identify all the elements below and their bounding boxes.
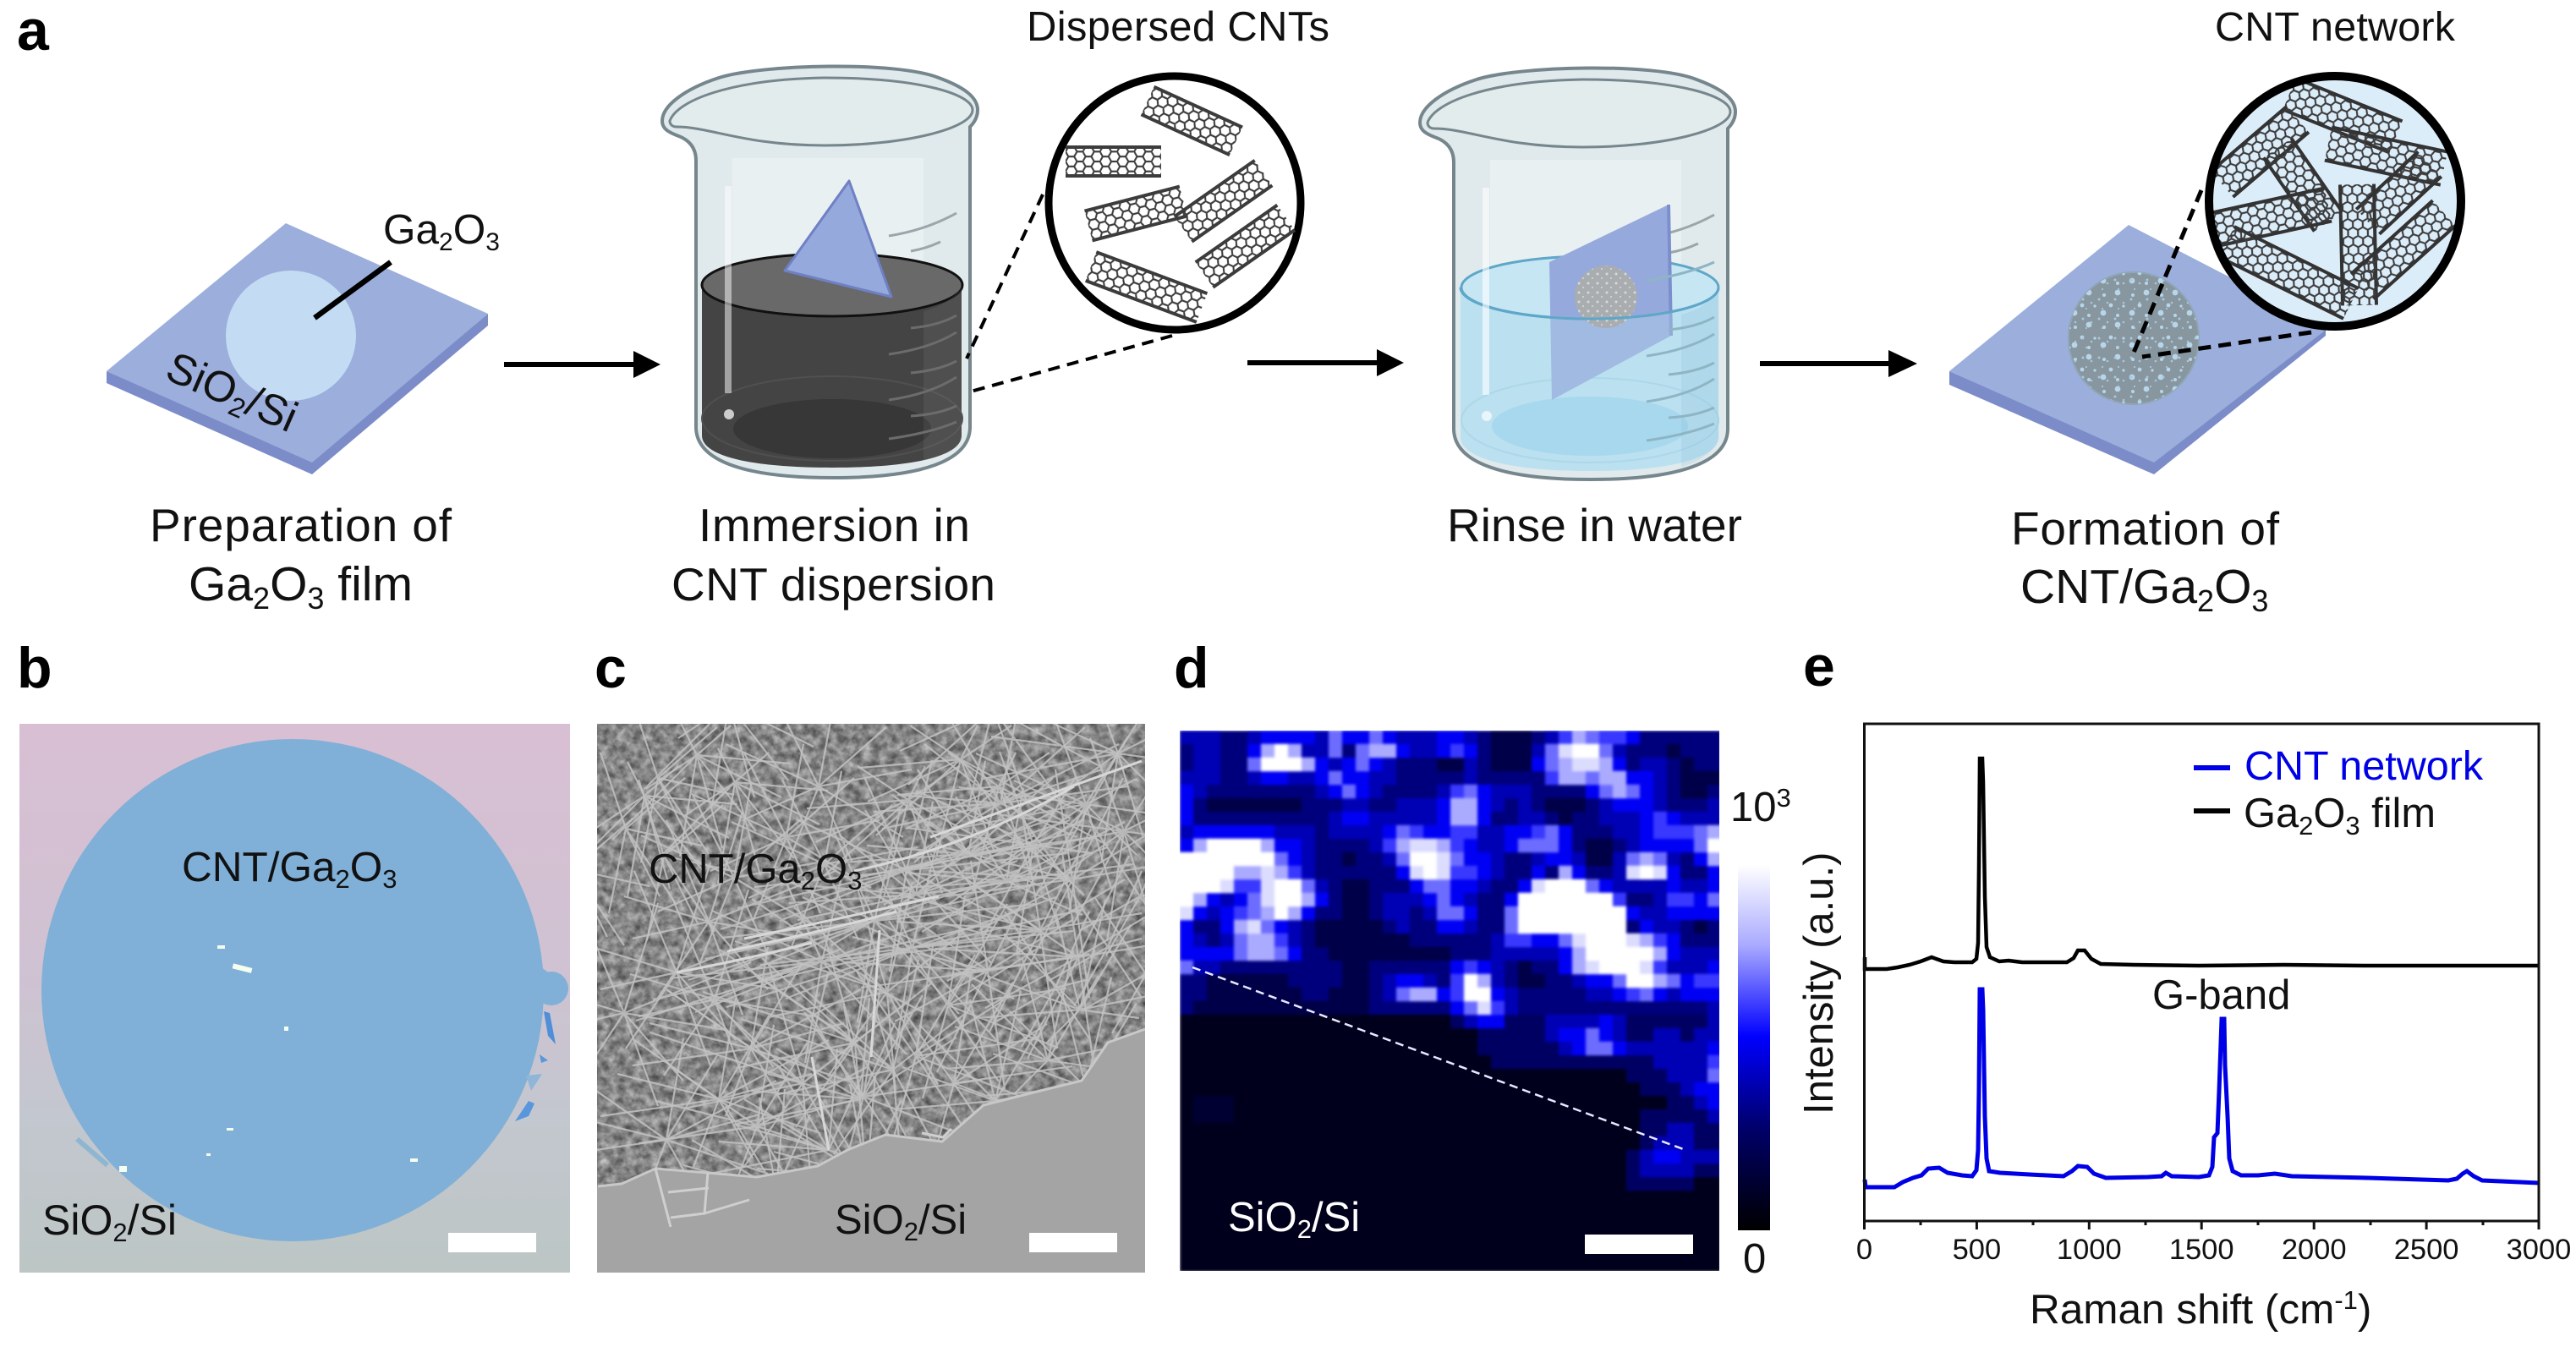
label: Ga2O3: 2 [439,228,453,256]
legend: film [2360,791,2436,836]
arrow 2 [1247,349,1404,376]
label: CNT/Ga2O3: O [350,844,382,890]
legend [2194,743,2484,841]
caption: Formation of CNT/Ga2O3: O [2214,560,2251,614]
icon: Ga2O3 film on substrate [107,223,488,474]
x tick labels [1856,1234,2571,1266]
caption: Formation of CNT/Ga2O3 [2011,502,2280,618]
caption: Preparation of Ga2O3 film: 2 [253,581,270,616]
panel a: fabrication process [17,0,2461,618]
caption: Preparation of Ga2O3 film: film [324,557,413,611]
colour bar: 0 [1743,1236,1766,1282]
x axis title: -1 [2334,1285,2358,1315]
panel label d: d [1174,636,1209,700]
label: SiO2/Si: /Si [128,1196,177,1244]
legend: CNT network [2244,743,2484,789]
caption: Preparation of Ga2O3 film: O [270,557,307,611]
optical micrograph [19,724,570,1273]
colour bar [1730,783,1791,1282]
y axis title: Intensity (a.u.) [1796,852,1842,1114]
x tick labels: 1000 [2057,1234,2122,1266]
x tick labels: 1500 [2169,1234,2234,1266]
panel label a: a [17,0,50,63]
dashed zoom lines 1 [967,194,1172,392]
caption: Formation of CNT/Ga2O3: Formation of [2011,502,2280,555]
caption: Immersion in CNT dispersion: CNT dispersion [671,558,995,611]
x tick labels: 500 [1953,1234,2001,1266]
label: Ga2O3: O [453,206,485,253]
label: CNT/Ga2O3: 2 [336,864,350,894]
dashed zoom lines 2 [2134,190,2311,357]
icon: beaker with CNT dispersion [662,66,978,478]
icon: Ga2O3 film on substrate: SiO [160,342,244,415]
label: CNT/Ga2O3: O [815,846,847,892]
caption: Preparation of Ga2O3 film [150,499,452,616]
label: CNT network: CNT network [2215,4,2456,50]
caption: Preparation of Ga2O3 film: 3 [307,581,324,616]
caption: Preparation of Ga2O3 film: Preparation of [150,499,452,551]
caption: Immersion in CNT dispersion: Immersion in [699,499,970,551]
icon: CNT/Ga2O3 on substrate [1949,225,2328,474]
caption: Formation of CNT/Ga2O3: 2 [2197,583,2214,618]
icon: substrate immersed [785,181,891,297]
axes box and ticks [1864,724,2539,1229]
label: Dispersed CNTs: Dispersed CNTs [1027,4,1329,50]
caption: Formation of CNT/Ga2O3: CNT/Ga [2020,560,2197,614]
label: SiO2/Si: SiO [835,1197,904,1243]
icon: Ga2O3 film on substrate: 2 [224,391,250,424]
caption: Immersion in CNT dispersion [671,499,995,611]
label: SiO2/Si: 2 [904,1217,918,1246]
label: Ga2O3: Ga [383,206,439,253]
x axis title: ) [2358,1286,2371,1333]
heatmap [1180,731,1721,1272]
label: SiO2/Si: /Si [918,1197,967,1243]
caption: Preparation of Ga2O3 film: Ga [189,557,253,611]
icon: Ga2O3 film on substrate: /Si [239,377,304,441]
colour bar: 10 [1730,785,1777,830]
x tick labels: 2000 [2282,1234,2347,1266]
panel b: optical image [17,636,570,1273]
x axis title: Raman shift (cm [2030,1286,2334,1333]
label: CNT/Ga2O3: 2 [801,866,815,895]
scale bar [1585,1235,1693,1254]
panel e: Raman spectra [1796,634,2571,1333]
dashed boundary line [1192,967,1685,1150]
label: SiO2/Si: 2 [1297,1214,1312,1244]
legend: 2 [2299,811,2313,841]
panel d: Raman map [1174,636,1791,1282]
x tick labels: 2500 [2394,1234,2458,1266]
label: SiO2/Si: SiO [1228,1195,1297,1240]
SEM micrograph [597,724,1145,1273]
line chart [1796,724,2571,1333]
magnifier: CNT network [2209,76,2461,326]
legend: 3 [2345,811,2360,841]
label: CNT/Ga2O3: 3 [847,866,862,895]
x tick labels: 3000 [2507,1234,2571,1266]
label: SiO2/Si: 2 [112,1218,128,1247]
label: SiO2/Si: SiO [42,1196,112,1244]
blue trace: CNT network [1865,989,2539,1187]
label: Ga2O3: 3 [485,228,500,256]
icon: beaker with water rinse [1420,68,1735,479]
caption: Formation of CNT/Ga2O3: 3 [2251,583,2268,618]
panel label e: e [1803,634,1835,698]
x tick labels: 0 [1856,1234,1872,1266]
annotation: G-band: G-band [2152,972,2290,1018]
caption: Rinse in water: Rinse in water [1447,499,1742,551]
panel label b: b [17,636,52,700]
label: CNT/Ga2O3: 3 [382,864,397,894]
arrow 1 [504,351,660,378]
colour bar: 3 [1777,783,1791,813]
black trace: Ga2O3 film [1865,758,2539,969]
panel label c: c [595,636,627,700]
legend: O [2313,791,2345,836]
panel c: SEM image [597,656,1145,1273]
magnifier: dispersed CNTs [1049,76,1301,330]
legend: Ga [2244,791,2299,836]
label: SiO2/Si: /Si [1312,1195,1360,1240]
label: CNT/Ga2O3: CNT/Ga [182,844,336,890]
arrow 3 [1760,350,1917,377]
label: CNT/Ga2O3: CNT/Ga [649,846,801,892]
